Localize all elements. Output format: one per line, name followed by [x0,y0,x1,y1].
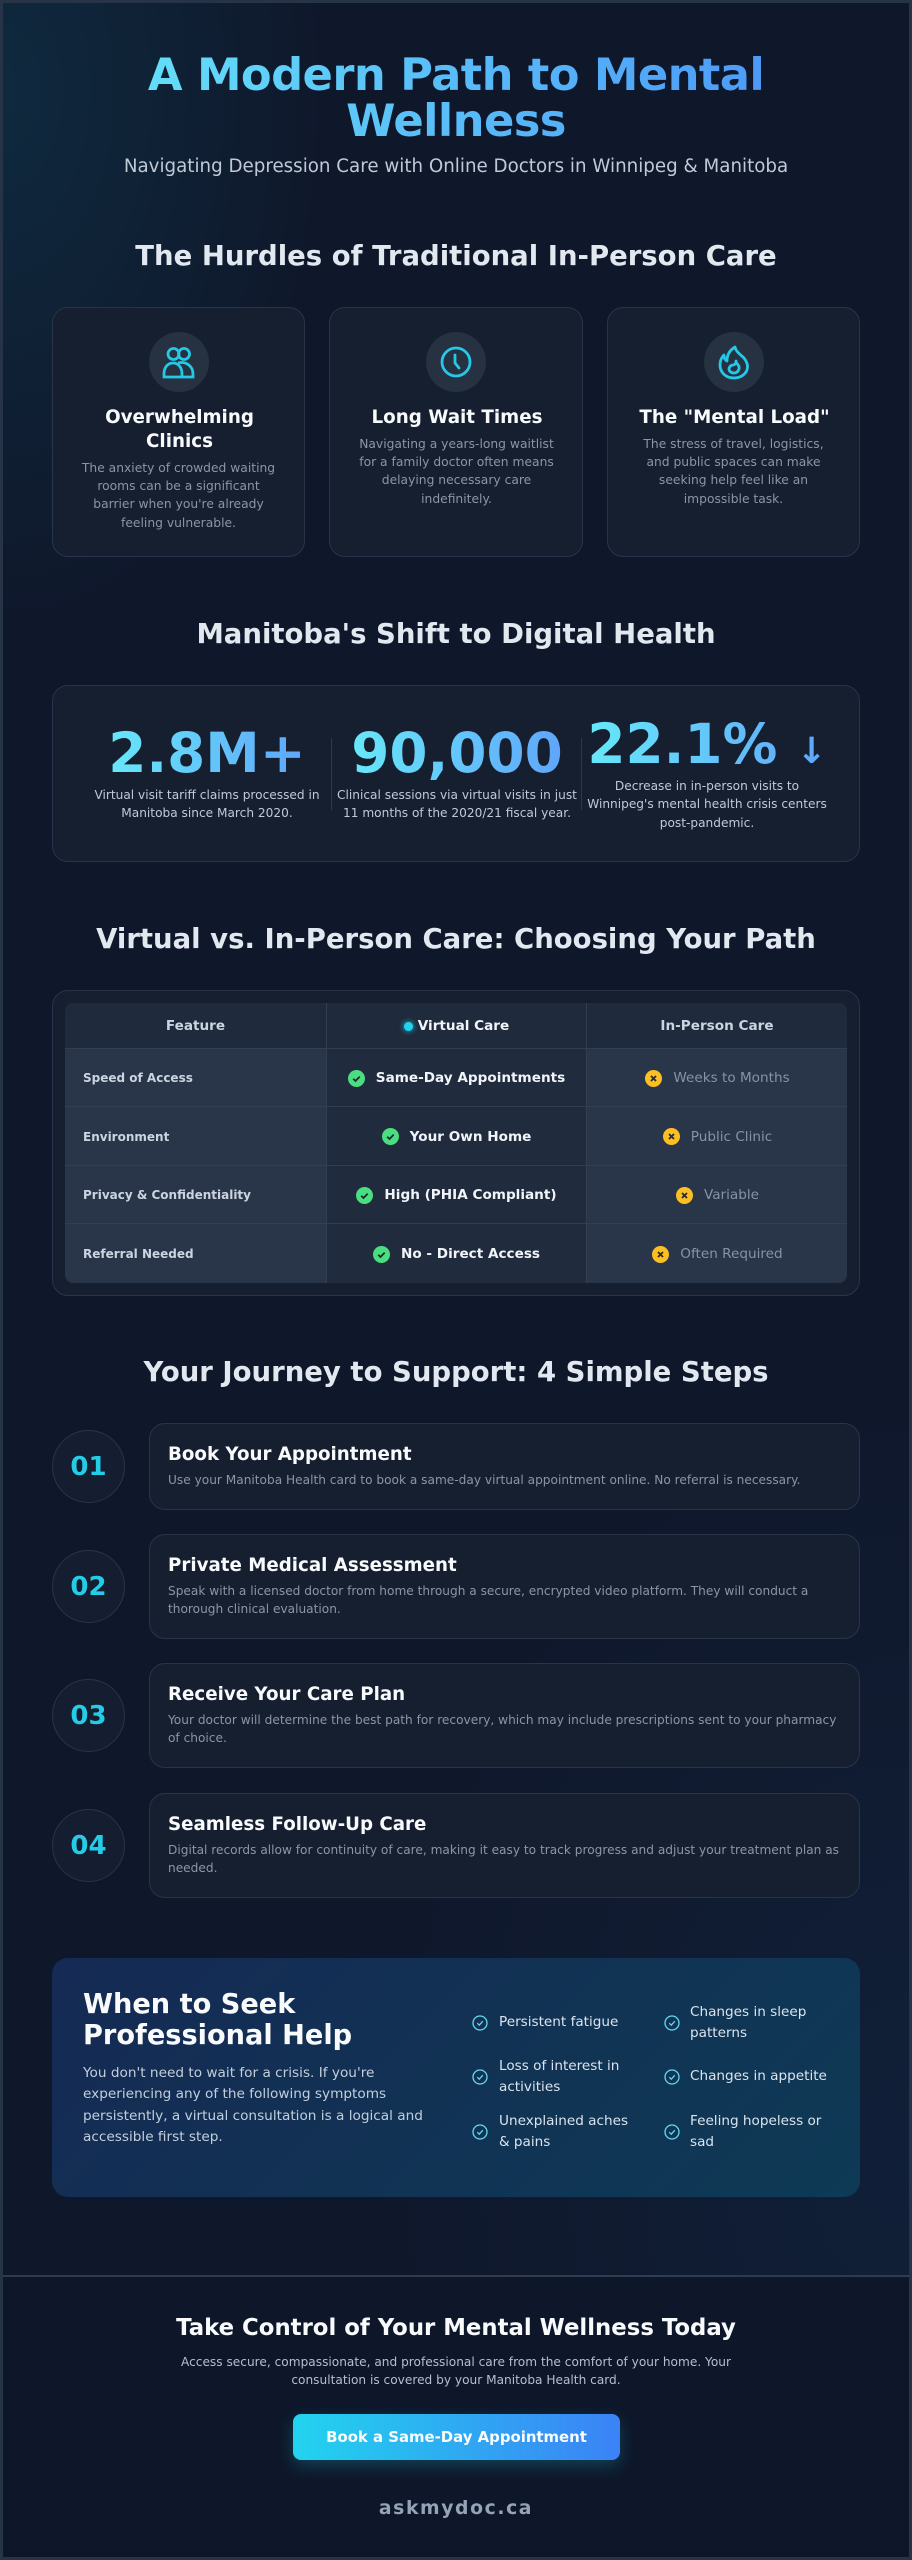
header: feature: Feature [166,1018,225,1034]
stat number: 22.1% ↓ [587,712,827,776]
heading: journey: Your Journey to Support: 4 Simple Steps [143,1356,769,1388]
heading: virtual vs in-person: Virtual vs. In-Person Care: Choosing Your Path [96,923,816,955]
subtitle: Navigating Depression Care with Online Doctors in Winnipeg & Manitoba [124,156,788,177]
stat text: Virtual visit tariff claims processed in Manitoba since March 2020. [94,788,320,820]
panel: mental load [607,307,860,557]
symptom: appetite: Changes in appetite [690,2068,827,2084]
heading: hurdles: The Hurdles of Traditional In-Person Care [135,240,777,272]
step text: Your doctor will determine the best path for recovery, which may include prescriptions sent to your pharmacy of choice. [168,1713,836,1745]
card title: Long Wait Times [372,407,542,428]
symptom: sleep: Changes in sleep patterns [690,2004,806,2041]
step number 03: 03 [70,1700,107,1730]
row label: privacy [65,1166,326,1224]
footer [0,2275,912,2560]
icon: people [149,332,209,392]
title [52,52,860,144]
in-person: speed: Weeks to Months [673,1070,790,1086]
symptom: aches: Unexplained aches & pains [499,2113,628,2150]
row label: speed [65,1049,326,1107]
row label: referral: Referral Needed [83,1247,194,1261]
step number 03 [52,1679,125,1752]
step number 04: 04 [70,1830,107,1860]
virtual: referral [326,1224,587,1283]
in-person: environment [587,1107,847,1166]
virtual: privacy: High (PHIA Compliant) [384,1187,557,1203]
panel: long wait times [329,307,583,557]
virtual: speed: Same-Day Appointments [376,1070,565,1086]
step text: Digital records allow for continuity of care, making it easy to track progress and adjust your treatment plan as needed. [168,1843,839,1875]
stat number: 2.8M+ [108,721,306,785]
step text: Use your Manitoba Health card to book a same-day virtual appointment online. No referral is necessary. [168,1473,800,1487]
in-person: privacy [587,1166,847,1224]
title: A Modern Path to Mental [148,48,764,101]
button: Book a Same-Day Appointment [326,2428,587,2446]
symptom: fatigue: Persistent fatigue [499,2014,618,2030]
card text: The anxiety of crowded waiting rooms can be a significant barrier when you're already feeling vulnerable. [82,461,275,530]
panel: when to seek help [52,1958,860,2197]
row label: privacy: Privacy & Confidentiality [83,1188,251,1202]
stat: clinical sessions [337,721,577,820]
footer heading: Take Control of Your Mental Wellness Today [176,2315,736,2341]
title: Wellness [346,94,566,147]
footer text: Access secure, compassionate, and professional care from the comfort of your home. Your consultation is covered by your Manitoba Health card. [181,2355,731,2387]
icon: clock [426,332,486,392]
stat text: Clinical sessions via virtual visits in just 11 months of the 2020/21 fiscal year. [337,788,577,820]
in-person: speed [587,1049,847,1107]
card text: The stress of travel, logistics, and public spaces can make seeking help feel like an impossible task. [643,437,824,506]
icon: flame [704,332,764,392]
header: virtual care [326,1003,587,1049]
virtual: privacy [326,1166,587,1224]
help text: You don't need to wait for a crisis. If you're experiencing any of the following symptoms persistently, a virtual consultation is a logical and accessible first step. [83,2065,423,2145]
in-person: privacy: Variable [704,1187,759,1203]
card text: Navigating a years-long waitlist for a family doctor often means delaying necessary care indefinitely. [359,437,554,506]
step text: Speak with a licensed doctor from home through a secure, encrypted video platform. They will conduct a thorough clinical evaluation. [168,1584,808,1616]
help heading: When to Seek Professional Help [83,1989,352,2051]
stat: tariff claims [94,721,320,820]
step title: Seamless Follow-Up Care [168,1814,426,1835]
step number 01 [52,1430,125,1503]
row label: speed: Speed of Access [83,1071,193,1085]
step number 02: 02 [70,1572,107,1602]
virtual: referral: No - Direct Access [401,1246,540,1262]
step title: Book Your Appointment [168,1444,412,1465]
header: virtual care: Virtual Care [418,1018,509,1034]
step number 04 [52,1809,125,1882]
card title: The "Mental Load" [639,407,830,428]
panel: statistics [52,685,860,862]
step 4 card [149,1793,860,1898]
in-person: referral [587,1224,847,1283]
panel: overwhelming clinics [52,307,305,557]
table [65,1003,847,1283]
row label: environment [65,1107,326,1166]
in-person: environment: Public Clinic [691,1128,772,1144]
header: in-person care: In-Person Care [660,1018,774,1034]
step number 01: 01 [70,1452,107,1482]
virtual: environment [326,1107,587,1166]
row label: environment: Environment [83,1130,169,1144]
stat number: 90,000 [351,721,563,785]
heading: digital health: Manitoba's Shift to Digital Health [196,618,716,650]
panel: comparison table [52,990,860,1296]
symptom: loss of interest: Loss of interest in activities [499,2058,619,2095]
virtual: speed [326,1049,587,1107]
in-person: referral: Often Required [680,1246,783,1262]
website: askmydoc.ca [379,2498,533,2519]
button [293,2414,620,2460]
symptom: hopeless: Feeling hopeless or sad [690,2113,821,2150]
stat: in-person decrease [587,712,827,830]
virtual: environment: Your Own Home [410,1128,531,1144]
step number 02 [52,1550,125,1623]
row label: referral [65,1224,326,1283]
header: feature [65,1003,326,1049]
card title: Overwhelming Clinics [105,407,254,452]
header: in-person care [587,1003,847,1049]
step title: Private Medical Assessment [168,1555,457,1576]
step 2 card [149,1534,860,1639]
step title: Receive Your Care Plan [168,1684,405,1705]
step 3 card [149,1663,860,1768]
step 1 card [149,1423,860,1510]
stat text: Decrease in in-person visits to Winnipeg's mental health crisis centers post-pandemic. [587,779,827,830]
